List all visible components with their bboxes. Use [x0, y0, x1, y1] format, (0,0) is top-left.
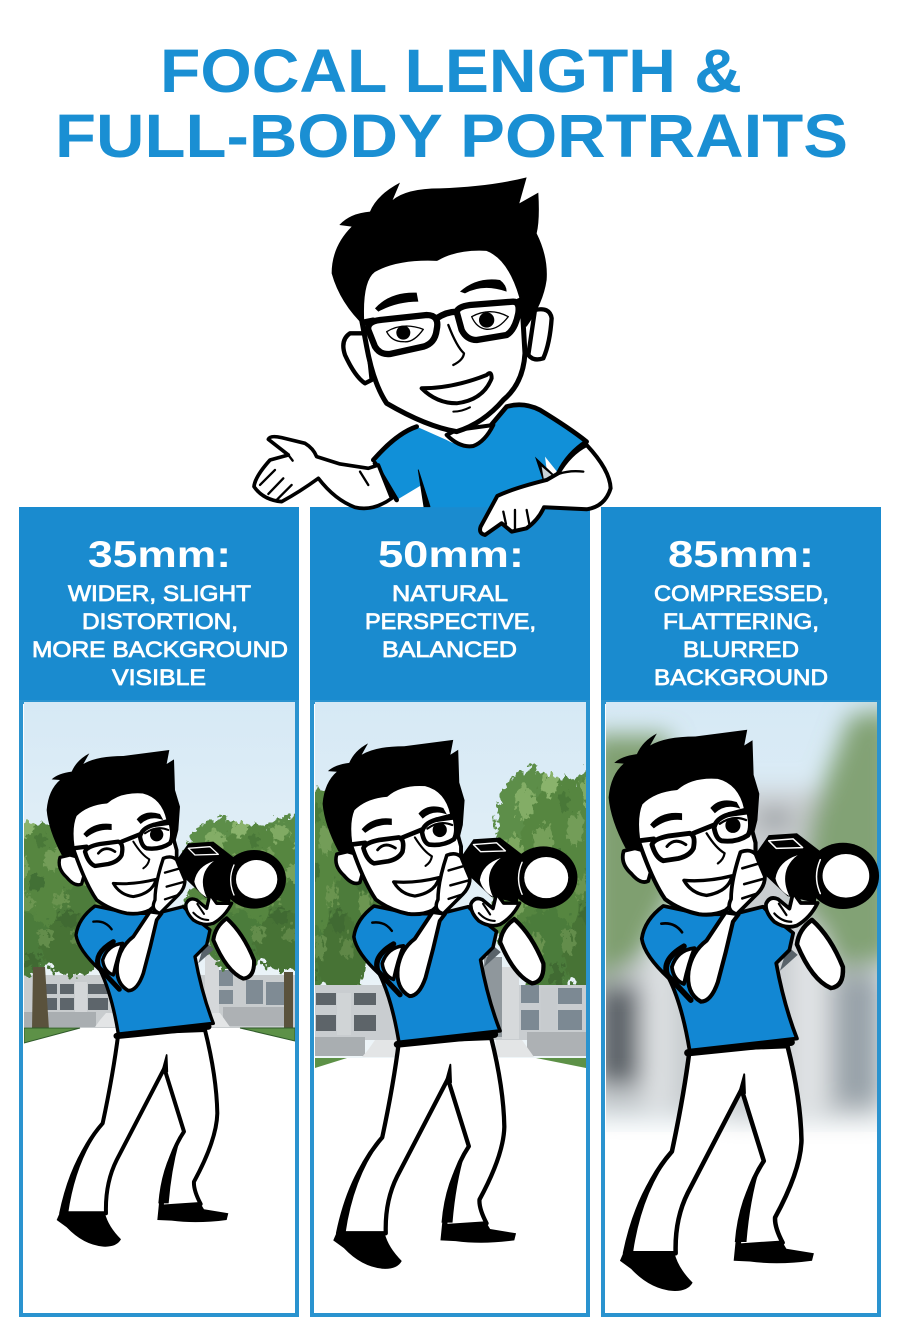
text: 85mm description: BACKGROUND — [654, 665, 828, 690]
text: 35mm description — [32, 581, 288, 690]
text: 85mm description — [654, 581, 829, 690]
text: 50mm description — [365, 581, 536, 662]
mouth — [422, 373, 492, 403]
hair — [332, 177, 547, 327]
heading: 50mm: 50mm: — [378, 534, 524, 575]
panel: 85mm — [590, 507, 895, 1318]
neck — [447, 425, 493, 446]
eyes — [387, 326, 423, 342]
ears — [343, 333, 372, 383]
text: 35mm description: WIDER, SLIGHT — [68, 581, 251, 606]
shirt — [373, 405, 587, 507]
background scene: 85mm — [606, 702, 877, 1132]
nose — [448, 325, 464, 365]
text: 85mm description: FLATTERING, — [663, 609, 819, 634]
title — [55, 37, 848, 170]
panel: 50mm — [310, 507, 590, 1317]
heading: 35mm: 35mm: — [88, 534, 231, 575]
eyebrows — [375, 293, 418, 312]
panel: 35mm — [19, 507, 299, 1317]
text: 35mm description: VISIBLE — [112, 665, 206, 690]
left arm and open hand — [254, 437, 392, 508]
text: 85mm description: BLURRED — [683, 637, 799, 662]
title: FULL-BODY PORTRAITS — [55, 102, 848, 170]
text: 35mm description: DISTORTION, — [82, 609, 238, 634]
glasses — [363, 298, 527, 354]
text: 50mm description: BALANCED — [382, 637, 517, 662]
text: 50mm description: NATURAL — [392, 581, 508, 606]
figure: photographer 35mm — [47, 750, 286, 1247]
text: 85mm description: COMPRESSED, — [654, 581, 829, 606]
figure: photographer 50mm — [323, 740, 577, 1269]
right arm and pointing hand — [480, 445, 611, 535]
text: 50mm description: PERSPECTIVE, — [365, 609, 536, 634]
heading: 85mm: 85mm: — [668, 534, 814, 575]
face — [361, 248, 525, 432]
text: 35mm description: MORE BACKGROUND — [32, 637, 288, 662]
figure: photographer 85mm — [609, 730, 879, 1291]
title: FOCAL LENGTH & — [160, 37, 742, 105]
character: presenter leaning on panels — [254, 177, 611, 535]
background scene: 35mm — [24, 702, 295, 1044]
background scene: 50mm — [315, 702, 586, 1068]
